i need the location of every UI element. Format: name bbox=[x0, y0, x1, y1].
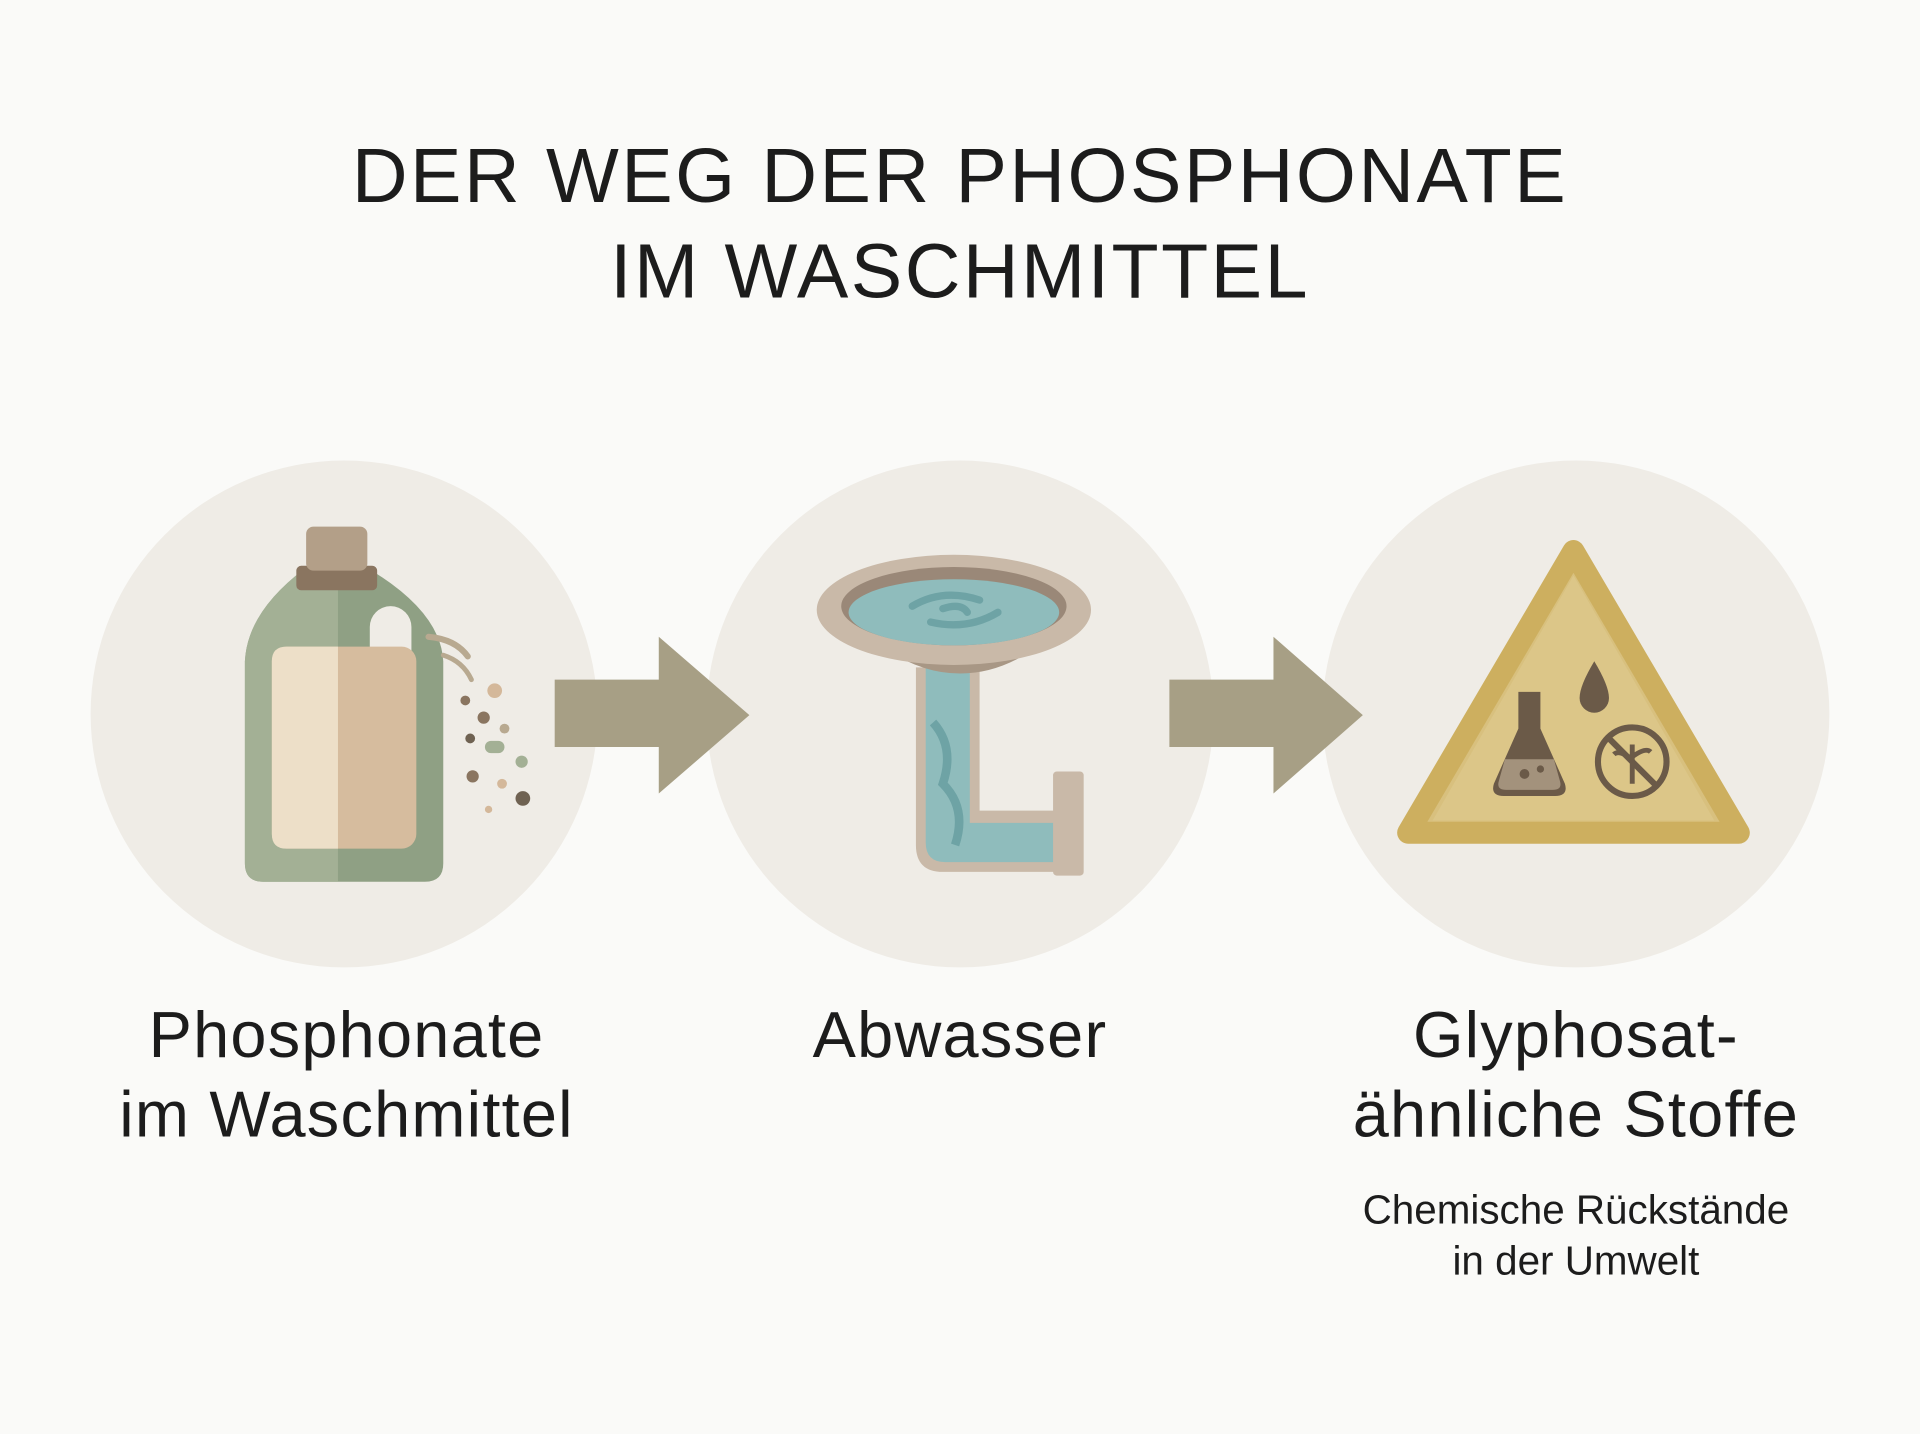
text: Chemische Rückstände in der Umwelt bbox=[1363, 1186, 1789, 1284]
label: Phosphonate im Waschmittel: im Waschmittel bbox=[119, 1077, 574, 1150]
label: Phosphonate im Waschmittel: Phosphonate bbox=[149, 998, 544, 1071]
arrow 1 bbox=[555, 637, 749, 794]
label: Glyphosat-ähnliche Stoffe bbox=[1353, 998, 1799, 1150]
icon: detergent bottle bbox=[245, 527, 530, 882]
arrow 2 bbox=[1169, 637, 1363, 794]
text: Chemische Rückstände in der Umwelt: in der Umwelt bbox=[1452, 1238, 1699, 1284]
panel: glyphosate-like substances bbox=[1322, 460, 1829, 967]
title: IM WASCHMITTEL bbox=[610, 229, 1310, 315]
icon: warning triangle bbox=[1408, 551, 1739, 833]
title: DER WEG DER PHOSPHONATE bbox=[352, 133, 1568, 219]
label: Glyphosat-ähnliche Stoffe: Glyphosat- bbox=[1413, 998, 1739, 1071]
text: Chemische Rückstände in der Umwelt: Chemische Rückstände bbox=[1363, 1186, 1789, 1232]
panel: detergent bbox=[91, 460, 598, 967]
title bbox=[352, 133, 1568, 315]
label: Phosphonate im Waschmittel bbox=[119, 998, 574, 1150]
panel: wastewater bbox=[707, 460, 1213, 967]
label: Abwasser: Abwasser bbox=[813, 998, 1107, 1071]
label: Glyphosat-ähnliche Stoffe: ähnliche Stoffe bbox=[1353, 1077, 1799, 1150]
icon: drain pipe bbox=[817, 555, 1091, 876]
